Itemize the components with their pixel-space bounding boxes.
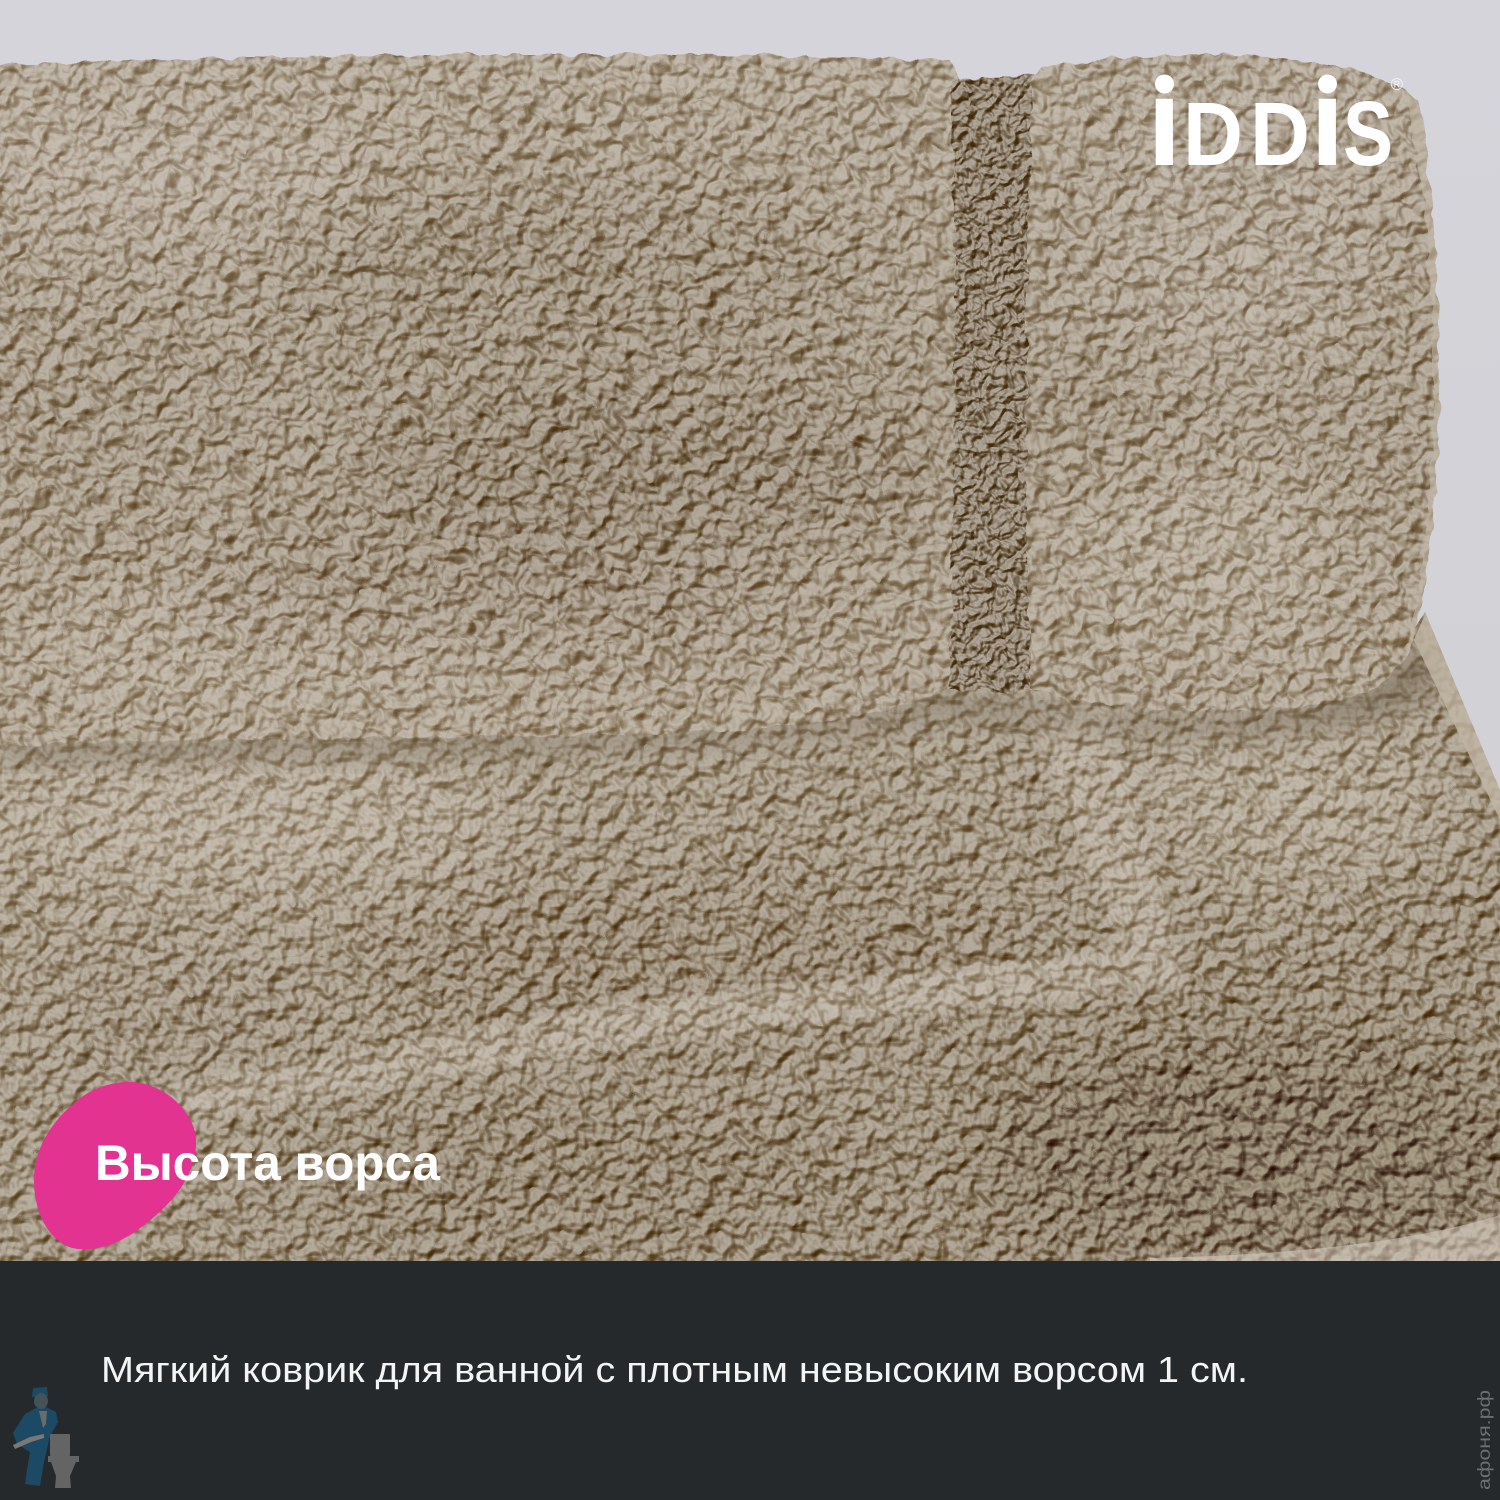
rug tonal patches [0, 100, 1370, 700]
woven border band [170, 710, 1185, 1120]
shirt [39, 1411, 47, 1428]
panel: lower rolled rug [0, 600, 1500, 1270]
logo: IDDIS: D [1183, 85, 1243, 185]
logo: IDDIS: ® [1390, 75, 1404, 94]
badge: pink blob [34, 1082, 196, 1249]
icon: plumber with toilet [13, 1387, 79, 1488]
rug tonal patches [0, 710, 1500, 1260]
logo: IDDIS: D [1250, 85, 1310, 185]
heading: pile height: Высота ворса [95, 1135, 441, 1191]
toilet [48, 1434, 79, 1488]
roll shading at right edge [1406, 90, 1442, 652]
description text: Мягкий коврик для ванной с плотным невысоким ворсом 1 см. [101, 1349, 1248, 1390]
watermark: site name: афоня.рф [1474, 1390, 1494, 1490]
logo: IDDIS: S [1343, 83, 1393, 185]
wrench [13, 1434, 44, 1449]
head [34, 1393, 48, 1409]
footer bar [0, 1261, 1500, 1500]
shadow under top rug [0, 620, 1440, 760]
logo: IDDIS [1155, 74, 1403, 166]
woven centre band [948, 74, 1034, 694]
plumber cap and body [13, 1387, 58, 1486]
rug right edge binding [1414, 612, 1500, 820]
panel: upper rolled rug [0, 40, 1500, 750]
logo: IDDIS: i [1310, 53, 1345, 192]
logo: IDDIS: i [1147, 53, 1182, 192]
